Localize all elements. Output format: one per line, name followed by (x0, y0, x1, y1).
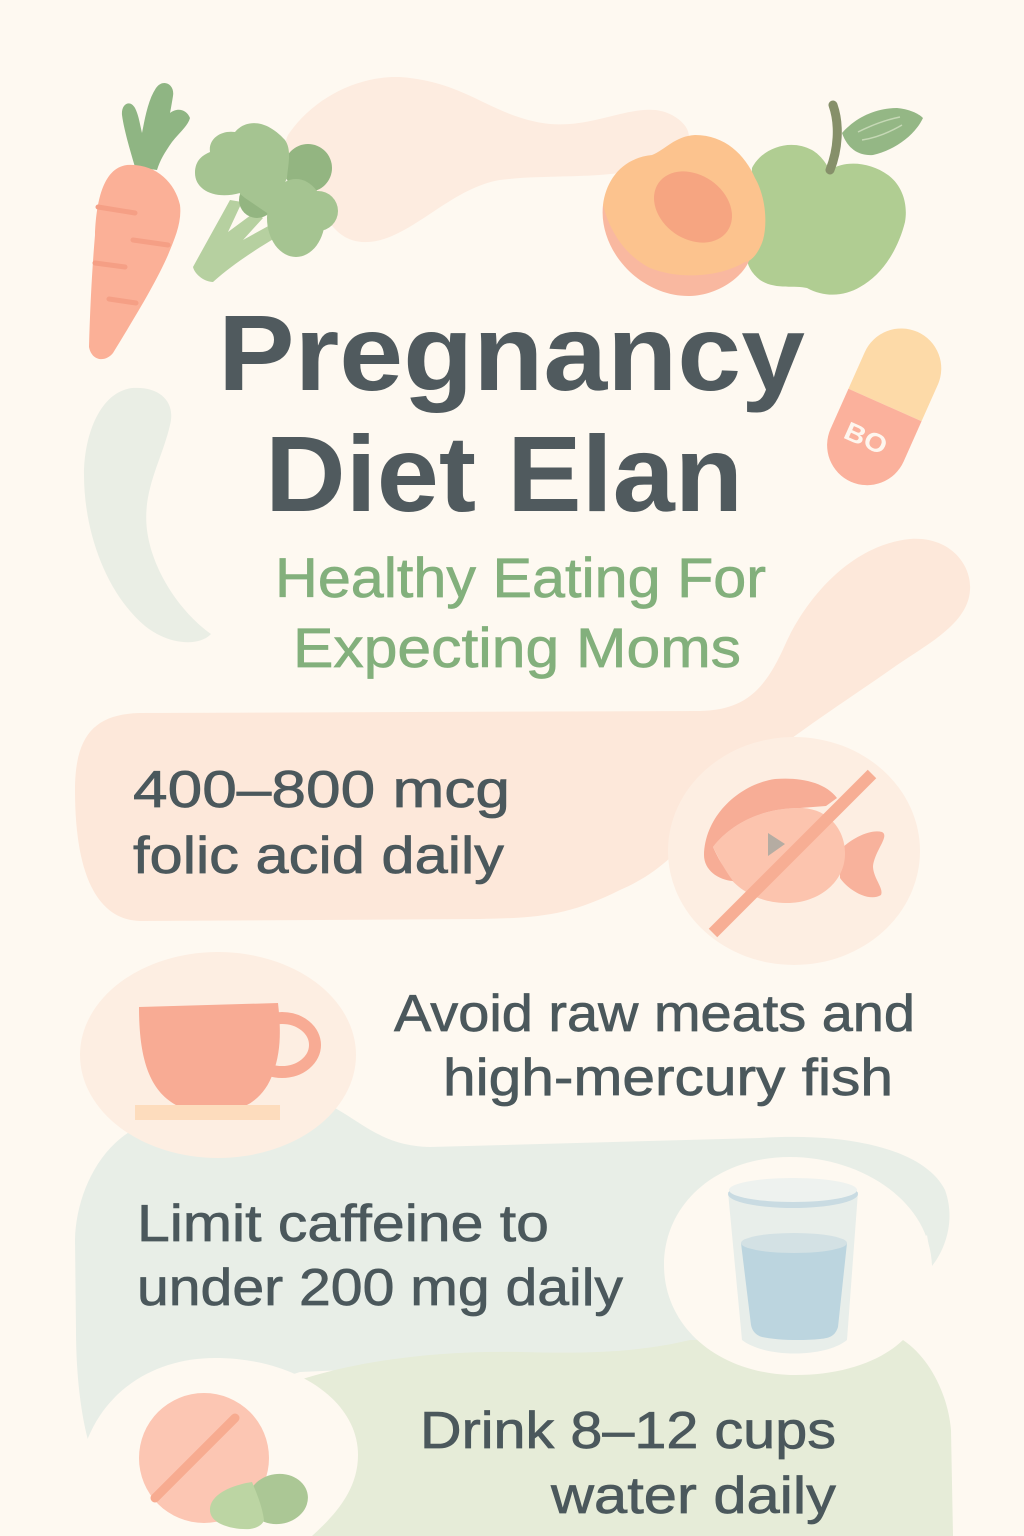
text: folic acid (133, 761, 510, 885)
cutout blob behind glass (664, 1157, 932, 1375)
icon: coffee cup (135, 1003, 315, 1120)
panel: caffeine band (75, 1108, 950, 1440)
icon: supplement tablets (139, 1393, 311, 1529)
icon: vitamin capsule (814, 316, 954, 498)
cutout blob behind tablets (79, 1358, 358, 1536)
subtitle: Healthy Eating For (275, 546, 766, 609)
background blob: left green crescent (84, 388, 211, 642)
title: Diet Elan (265, 413, 743, 534)
icon: green apple (747, 105, 923, 295)
title: Pregnancy (218, 292, 805, 413)
text: avoid raw meats (394, 985, 915, 1107)
text: limit caffeine: Limit caffeine to (137, 1195, 549, 1253)
icon: peach half (603, 135, 765, 296)
icon: vitamin capsule: BO (840, 415, 892, 461)
text: avoid raw meats: high-mercury fish (443, 1049, 893, 1107)
text: limit caffeine: under 200 mg daily (137, 1259, 623, 1317)
text: drink water: Drink 8–12 cups (420, 1402, 836, 1460)
text: folic acid: folic acid daily (133, 827, 504, 885)
text: limit caffeine (137, 1195, 623, 1317)
text: folic acid: 400–800 mcg (133, 761, 510, 819)
title (218, 292, 805, 534)
panel: water band (250, 1340, 953, 1536)
icon: crossed out fish (704, 774, 884, 933)
icon circle: no fish (668, 737, 920, 965)
icon circle: coffee cup blob background (80, 952, 356, 1158)
icon: glass of water (728, 1178, 858, 1354)
text: drink water: water daily (550, 1467, 836, 1525)
text: drink water (420, 1402, 836, 1525)
subtitle (275, 546, 766, 679)
panel: folic acid banner (75, 539, 970, 921)
subtitle: Expecting Moms (293, 616, 741, 679)
icon: broccoli (193, 123, 338, 282)
icon: carrot (89, 83, 190, 359)
background blob: top peach wave (286, 77, 689, 242)
text: avoid raw meats: Avoid raw meats and (394, 985, 915, 1043)
